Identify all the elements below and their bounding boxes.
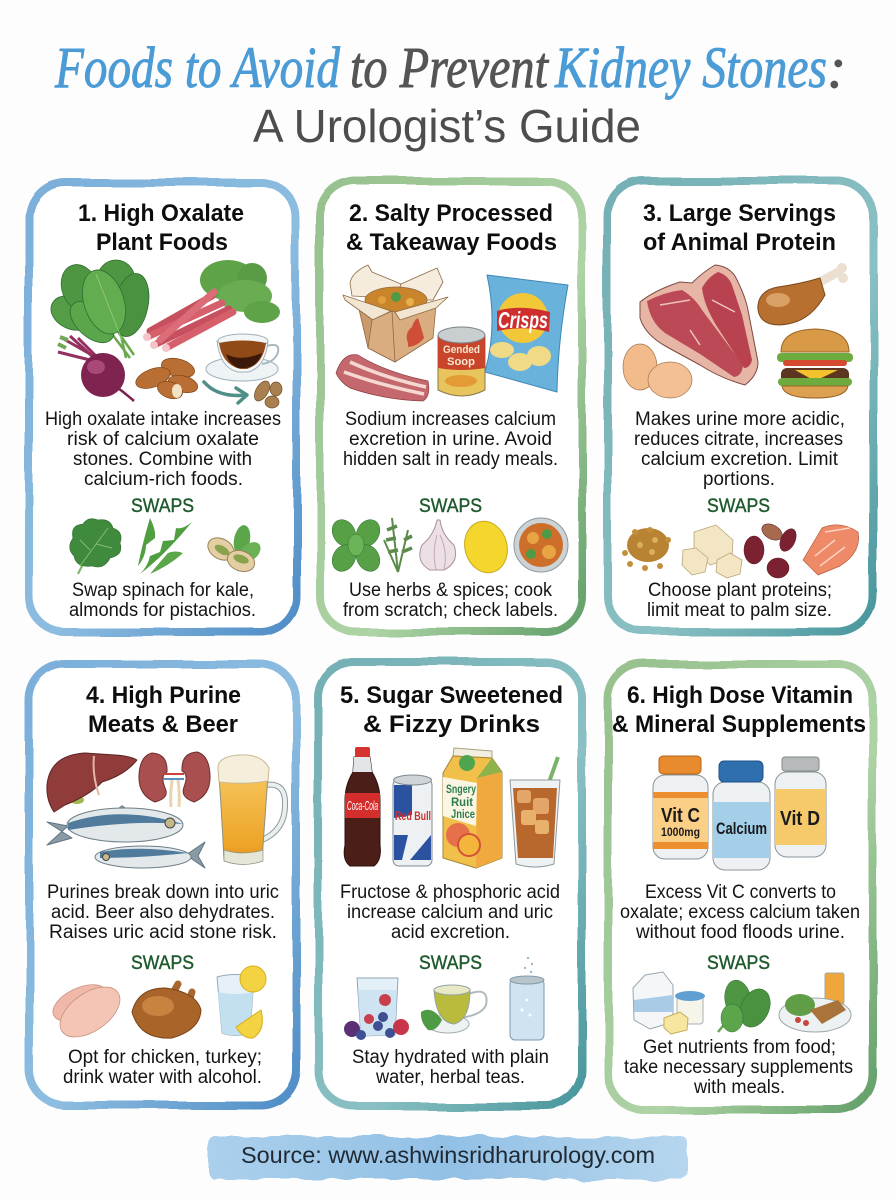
arrow to nuts xyxy=(204,382,247,403)
icon: rhubarb xyxy=(143,260,280,352)
panel 3 body text: calcium excretion. Limit xyxy=(641,449,839,470)
panel 5 swap text: water, herbal teas. xyxy=(375,1067,525,1088)
icon: vitamin D bottle xyxy=(775,757,826,857)
icon: spinach swap xyxy=(718,978,776,1032)
panel 1 body text: calcium-rich foods. xyxy=(84,469,243,490)
panel 3 body text: portions. xyxy=(703,469,775,490)
panel 4 body text: Raises uric acid stone risk. xyxy=(49,922,277,943)
icon: vitamin C bottle xyxy=(653,756,708,859)
panel 2 body text: hidden salt in ready meals. xyxy=(343,449,558,470)
panel 5 border xyxy=(318,662,582,1106)
panel 6 swap text: with meals. xyxy=(693,1077,785,1098)
carton label xyxy=(446,784,476,821)
panel 2 body text: Sodium increases calcium xyxy=(345,409,556,430)
icon: basil xyxy=(327,515,385,576)
panel 6 body text: without food floods urine. xyxy=(635,922,845,943)
icon: liver xyxy=(47,753,137,812)
carton label: Ruit xyxy=(451,797,473,809)
crisps logo: Crisps xyxy=(498,307,548,333)
panel 4 heading xyxy=(86,682,241,738)
panel 3 body text xyxy=(634,409,845,490)
panel 5 swaps label: SWAPS xyxy=(419,953,482,974)
icon: chicken drumstick xyxy=(758,263,848,325)
icon: beetroot xyxy=(58,336,134,401)
panel 5 swap text: Stay hydrated with plain xyxy=(352,1047,549,1068)
icon: kale xyxy=(70,519,121,574)
icon: juice carton xyxy=(443,748,502,868)
panel 4 body text: Purines break down into uric xyxy=(47,882,279,903)
panel 6 body text: Excess Vit C converts to xyxy=(645,882,836,903)
icon: t-bone steak xyxy=(640,265,758,385)
panel 1 heading: 1. High Oxalate xyxy=(78,200,244,227)
icon: large sardine xyxy=(47,805,183,845)
title: Foods to Avoid xyxy=(54,35,341,100)
panel 1 heading xyxy=(78,200,244,256)
panel 3 swaps label: SWAPS xyxy=(707,496,770,517)
panel 4 swap text: Opt for chicken, turkey; xyxy=(68,1047,262,1068)
panel 2 heading xyxy=(346,200,557,256)
icon: energy drink can xyxy=(393,775,432,866)
panel 4 swap text xyxy=(63,1047,262,1088)
icon: spinach xyxy=(45,259,154,358)
icon: dairy xyxy=(633,972,705,1034)
icon: balanced plate xyxy=(779,973,851,1032)
panel 2 swap text: Use herbs & spices; cook xyxy=(349,580,552,601)
panel 3 swap text: Choose plant proteins; xyxy=(648,580,832,601)
panel 4 swap text: drink water with alcohol. xyxy=(63,1067,262,1088)
label text: Calcium xyxy=(716,819,767,838)
panel 6 swap text xyxy=(624,1037,853,1098)
panel 2 swaps label: SWAPS xyxy=(419,496,482,517)
icon: sparkling water can xyxy=(510,957,544,1040)
label text xyxy=(661,805,700,839)
title: to Prevent xyxy=(350,35,550,100)
icon: almonds xyxy=(133,355,200,402)
icon: lemon xyxy=(459,516,513,578)
panel 5 body text: acid excretion. xyxy=(391,922,510,943)
panel 4 body text xyxy=(47,882,279,943)
icon: curry bowl xyxy=(514,518,568,572)
panel 4: high purine meats and beer xyxy=(29,664,296,1105)
can label xyxy=(443,344,480,368)
icon: water with lemon xyxy=(217,966,266,1038)
panel 4 body text: acid. Beer also dehydrates. xyxy=(51,902,275,923)
icon: pistachios xyxy=(204,524,264,575)
can label: Red Bull xyxy=(395,809,431,823)
icon: iced tea xyxy=(510,757,560,867)
panel 6 heading: 6. High Dose Vitamin xyxy=(627,682,853,709)
title: A Urologist’s Guide xyxy=(253,100,641,152)
panel 3 heading xyxy=(643,200,836,256)
panel 6 body text: oxalate; excess calcium taken xyxy=(620,902,860,923)
panel 2 body text: excretion in urine. Avoid xyxy=(349,429,552,450)
panel 3: large servings of animal protein xyxy=(608,181,873,632)
panel 3 body text: Makes urine more acidic, xyxy=(635,409,845,430)
panel 4 heading: Meats & Beer xyxy=(88,711,238,738)
panel 5 body text: increase calcium and uric xyxy=(347,902,553,923)
panel 1 body text xyxy=(45,409,281,490)
icon: roast chicken xyxy=(132,984,201,1038)
icon: nuts xyxy=(251,378,282,408)
panel 2 swap text: from scratch; check labels. xyxy=(343,600,558,621)
panel 1 swap text xyxy=(69,580,256,621)
icon: beer mug xyxy=(218,755,285,864)
panel 6 border xyxy=(608,664,873,1110)
panel 5 body text: Fructose & phosphoric acid xyxy=(340,882,560,903)
panel 5: sugar sweetened and fizzy drinks xyxy=(318,662,582,1106)
panel 1 body text: stones. Combine with xyxy=(73,449,252,470)
panel 6: high dose vitamin and mineral supplements xyxy=(608,664,873,1110)
panel 1 swap text: almonds for pistachios. xyxy=(69,600,256,621)
carton label: Jnice xyxy=(451,809,475,821)
panel 5 body text xyxy=(340,882,560,943)
icon: chicken breasts xyxy=(47,977,129,1047)
can label: Gended xyxy=(443,344,480,356)
panel 6 swap text: take necessary supplements xyxy=(624,1057,853,1078)
icon: cola bottle xyxy=(344,747,380,866)
panel 3 swap text: limit meat to palm size. xyxy=(647,600,832,621)
icon: bacon xyxy=(336,355,429,401)
icon: small sardine xyxy=(95,842,205,868)
icon: soup can xyxy=(438,327,485,396)
panel 2 heading: & Takeaway Foods xyxy=(346,229,557,256)
panel 3 body text: reduces citrate, increases xyxy=(634,429,843,450)
label text: Vit C xyxy=(661,805,700,827)
panel 2 border xyxy=(320,181,582,632)
icon: kidneys xyxy=(139,752,210,807)
panel 1 border xyxy=(29,182,296,632)
panel 4 border xyxy=(29,664,296,1105)
label text: Vit D xyxy=(780,808,820,830)
icon: takeaway box xyxy=(343,265,448,362)
icon: calcium bottle xyxy=(713,761,770,870)
panel 1 swap text: Swap spinach for kale, xyxy=(72,580,254,601)
panel 2 swap text xyxy=(343,580,558,621)
panel 3 swap text xyxy=(647,580,832,621)
panel 6 swaps label: SWAPS xyxy=(707,953,770,974)
icon: berry water xyxy=(344,978,409,1040)
panel 1 body text: risk of calcium oxalate xyxy=(67,429,259,450)
panel 6 heading: & Mineral Supplements xyxy=(612,711,866,738)
icon: arugula xyxy=(138,518,192,574)
icon: tofu xyxy=(682,525,742,578)
panel 2 heading: 2. Salty Processed xyxy=(349,200,553,227)
panel 4 heading: 4. High Purine xyxy=(86,682,241,709)
panel 5 heading: 5. Sugar Sweetened xyxy=(340,682,563,709)
icon: herbal tea xyxy=(421,985,487,1033)
icon: cup of tea xyxy=(206,334,278,381)
panel 3 heading: 3. Large Servings xyxy=(643,200,836,227)
icon: lentils xyxy=(622,527,671,571)
panel 6 body text xyxy=(620,882,860,943)
label text: 1000mg xyxy=(661,825,700,839)
source text: Source: www.ashwinsridharurology.com xyxy=(241,1142,655,1168)
panel 6 heading xyxy=(612,682,866,738)
bottle label: Coca-Cola xyxy=(347,798,378,813)
panel 3 border xyxy=(608,181,873,632)
panel 1 body text: High oxalate intake increases xyxy=(45,409,281,430)
panel 4 swaps label: SWAPS xyxy=(131,953,194,974)
icon: crisps bag xyxy=(485,275,568,392)
panel 5 swap text xyxy=(352,1047,549,1088)
panel 2: salty processed and takeaway foods xyxy=(320,181,582,632)
carton label: Sngery xyxy=(446,784,476,796)
panel 6 swap text: Get nutrients from food; xyxy=(643,1037,836,1058)
panel 5 heading xyxy=(340,682,563,738)
panel 1 heading: Plant Foods xyxy=(96,229,228,256)
icon: beans xyxy=(744,520,799,578)
icon: thyme xyxy=(384,518,412,572)
icon: burger xyxy=(777,329,853,398)
panel 5 heading: & Fizzy Drinks xyxy=(363,711,540,738)
can label: Soop xyxy=(447,356,475,368)
panel 3 heading: of Animal Protein xyxy=(643,229,836,256)
title: : xyxy=(827,35,846,100)
title xyxy=(54,35,846,152)
icon: salmon xyxy=(803,525,859,575)
title: Kidney Stones xyxy=(554,35,827,100)
icon: eggs xyxy=(623,344,692,398)
panel 2 body text xyxy=(343,409,558,470)
panel 1: high oxalate plant foods xyxy=(29,182,296,632)
source banner xyxy=(209,1136,687,1179)
icon: garlic xyxy=(420,520,456,570)
panel 1 swaps label: SWAPS xyxy=(131,496,194,517)
